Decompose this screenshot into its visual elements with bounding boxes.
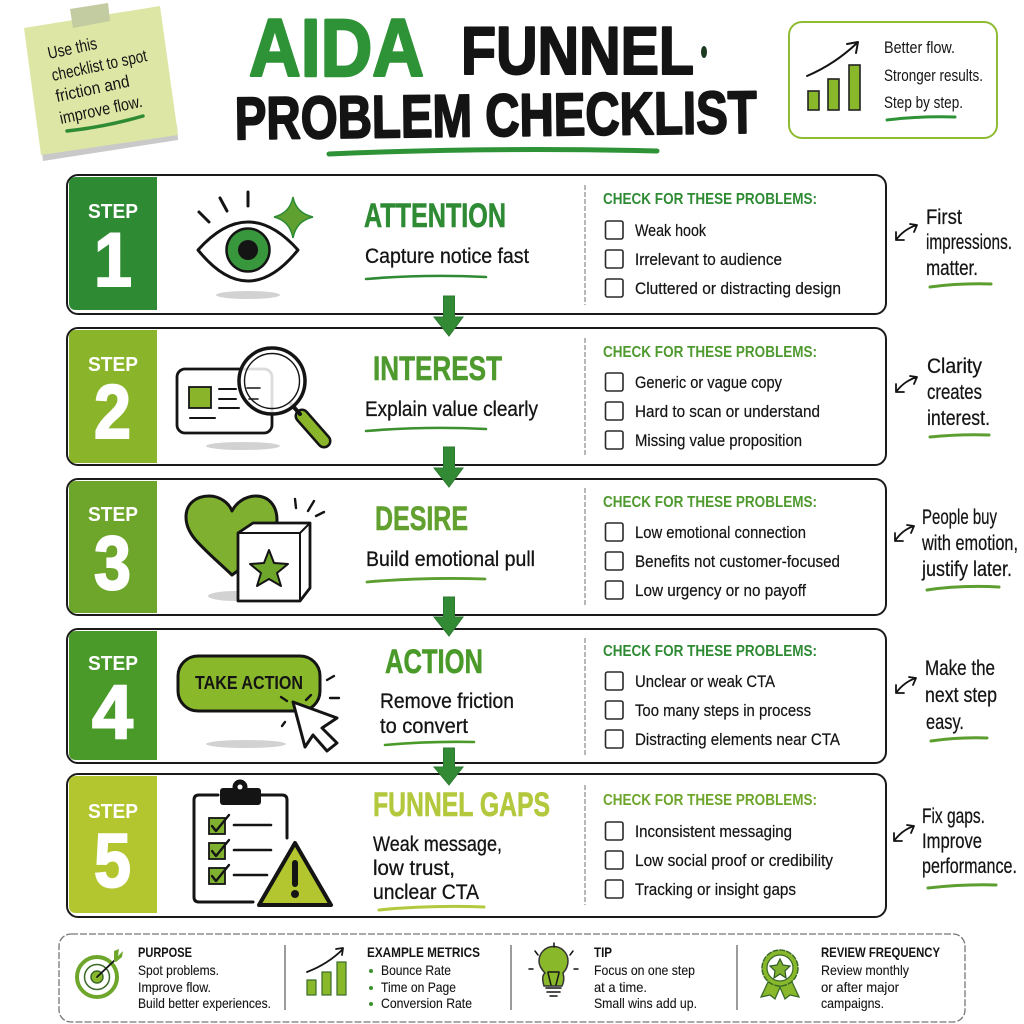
checklist: step 1: Cluttered or distracting design [635,279,841,298]
step badge 5 [69,776,157,913]
checklist: step 3: Low emotional connection [635,523,806,542]
description: remove friction to convert: Remove friction [380,690,514,713]
sticky note text: Use this [46,34,99,63]
purpose text: Improve flow. [138,979,211,995]
step badge 3: STEP [88,504,138,526]
checklist: step 5: Inconsistent messaging [635,822,792,841]
step badge 3 [69,481,157,613]
step badge 2 [69,330,157,463]
icon: growth chart [807,42,860,110]
step badge 1: 1 [94,218,132,303]
step badge 2: 2 [94,370,131,455]
footer panel [59,934,965,1022]
side note: first impressions: matter. [926,257,978,280]
checklist: step 1: Weak hook [635,221,706,240]
step badge 3: 3 [94,521,131,606]
panel: step 3 desire [67,479,886,615]
tip text: at a time. [594,979,647,995]
step badge 4: 4 [92,670,133,755]
description: weak message, low trust, unclear cta: unclear CTA [373,881,479,904]
arrow: step 1 to 2 [434,296,463,336]
checklist: step 4: Unclear or weak CTA [635,672,776,691]
callout: better flow: Better flow. [884,38,955,57]
checklist: step 1: Irrelevant to audience [635,250,782,269]
metrics text: Time on Page [381,979,456,995]
side note: make the next step easy [896,657,997,741]
description: explain value clearly: Explain value clearly [365,398,538,421]
arrow: step 4 to 5 [434,748,463,785]
checklist: step 3 [603,494,840,600]
checklist: step 3: CHECK FOR THESE PROBLEMS: [603,494,817,511]
side note: clarity creates interest: creates [927,381,982,404]
heading: interest: INTEREST [373,350,502,388]
review frequency text [821,944,941,1011]
icon: eye [198,192,313,299]
icon: heart and box [186,496,324,601]
side note: first impressions: First [926,206,962,229]
purpose text: Spot problems. [138,962,219,978]
tip text: Focus on one step [594,962,695,978]
title [234,3,757,154]
metrics text: Conversion Rate [381,995,472,1011]
step badge 1: STEP [88,201,138,223]
checklist: step 2: CHECK FOR THESE PROBLEMS: [603,344,817,361]
tip text: TIP [594,944,612,960]
review frequency text: REVIEW FREQUENCY [821,944,941,960]
side note: clarity creates interest [896,355,990,437]
callout: better flow: Stronger results. [884,66,983,85]
sticky note [24,3,178,161]
icon: take action button and cursor: TAKE ACTION [195,673,303,693]
heading: desire: DESIRE [375,500,468,538]
title: FUNNEL [461,13,694,89]
purpose text: Build better experiences. [138,995,271,1011]
review frequency text: Review monthly [821,962,909,978]
step badge 4 [69,631,157,760]
icon: magnifier over card [177,348,324,450]
side note: fix gaps improve performance: Fix gaps. [922,805,985,828]
metrics text: Bounce Rate [381,962,451,978]
side note: make the next step easy: easy. [926,711,964,734]
side note: first impressions [896,206,1012,287]
checklist: step 5: CHECK FOR THESE PROBLEMS: [603,792,817,809]
callout: better flow: Step by step. [884,93,963,112]
side note: make the next step easy: Make the [925,657,995,680]
panel: step 5 funnel gaps [67,774,886,917]
checklist: step 1: CHECK FOR THESE PROBLEMS: [603,191,817,208]
panel: step 2 interest [67,328,886,465]
description: build emotional pull: Build emotional pull [366,548,535,571]
checklist: step 5: Low social proof or credibility [635,851,833,870]
description: weak message, low trust, unclear cta [373,833,502,904]
icon: clipboard with warning [194,780,331,905]
purpose text: PURPOSE [138,944,192,960]
sticky note text: improve flow. [58,92,144,128]
checklist: step 5 [603,792,833,899]
side note: make the next step easy: next step [925,684,997,707]
metrics text [367,944,480,1011]
checklist: step 3: Benefits not customer-focused [635,552,840,571]
side note: people buy with emotion: justify later. [921,558,1012,581]
step badge 5: STEP [88,801,138,823]
icon: metrics chart [307,948,346,995]
arrow: step 3 to 4 [434,597,463,636]
icon: light bulb [529,943,578,996]
checklist: step 5: Tracking or insight gaps [635,880,796,899]
tip text [594,944,697,1011]
sticky note text: friction and [54,72,131,106]
step badge 1 [69,177,157,310]
title: AIDA [249,3,424,94]
icon: target [77,949,123,997]
checklist: step 4: Distracting elements near CTA [635,730,841,749]
checklist: step 1 [603,191,841,298]
sticky note text [46,34,149,128]
checklist: step 4: Too many steps in process [635,701,811,720]
side note: fix gaps improve performance [894,805,1017,888]
step badge 4: STEP [88,653,138,675]
checklist: step 3: Low urgency or no payoff [635,581,806,600]
heading: attention: ATTENTION [364,197,506,235]
checklist: step 4 [603,643,841,749]
side note: people buy with emotion [895,506,1018,590]
side note: clarity creates interest: interest. [927,407,990,430]
side note: people buy with emotion: People buy [922,506,997,529]
review frequency text: campaigns. [821,995,884,1011]
title: PROBLEM CHECKLIST [234,79,757,152]
checklist: step 2: Hard to scan or understand [635,402,820,421]
checklist: step 4: CHECK FOR THESE PROBLEMS: [603,643,817,660]
description: weak message, low trust, unclear cta: low trust, [373,857,455,880]
side note: fix gaps improve performance: Improve [922,830,982,853]
icon: award badge [761,950,799,999]
tip text: Small wins add up. [594,995,697,1011]
description: remove friction to convert [380,690,514,738]
metrics text: EXAMPLE METRICS [367,944,480,960]
step badge 5: 5 [94,819,131,904]
sticky note text: checklist to spot [50,46,149,85]
heading: funnel gaps: FUNNEL GAPS [373,786,550,824]
review frequency text: or after major [821,979,899,995]
description: weak message, low trust, unclear cta: Weak message, [373,833,502,856]
heading: action: ACTION [385,643,483,681]
description: capture notice fast: Capture notice fast [365,245,529,268]
purpose text [138,944,271,1011]
icon: take action button and cursor [178,656,339,751]
panel: step 1 attention [67,175,886,314]
step badge 2: STEP [88,354,138,376]
checklist: step 2 [603,344,820,450]
panel: step 4 action [67,629,886,763]
checklist: step 2: Missing value proposition [635,431,802,450]
arrow: step 2 to 3 [434,447,463,487]
side note: clarity creates interest: Clarity [927,355,982,378]
description: remove friction to convert: to convert [380,715,468,738]
checklist: step 2: Generic or vague copy [635,373,782,392]
callout: better flow [789,22,997,138]
